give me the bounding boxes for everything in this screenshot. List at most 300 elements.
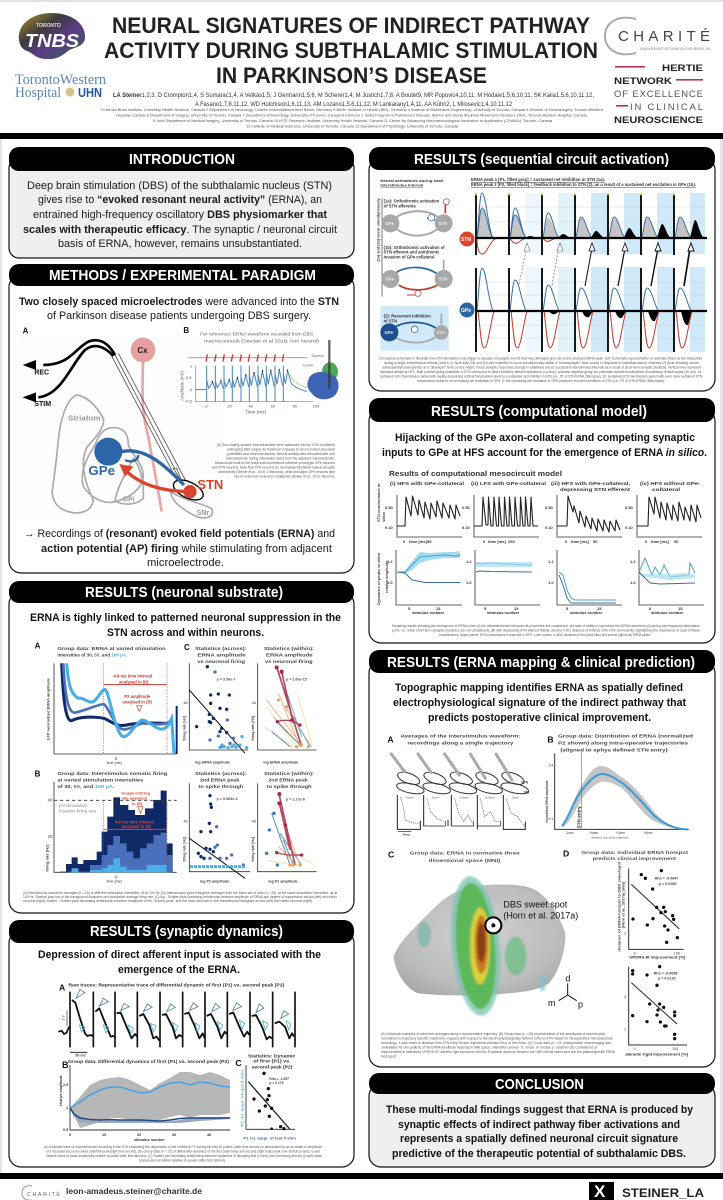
chart A: ERNA amplitude vs time: 4-9 ms time interval — [113, 674, 152, 679]
upper charts: STN conductance traces: 0.50 — [545, 505, 554, 510]
chart D: clinical improvement scatter: p = 0.0168 — [659, 882, 676, 886]
footer: X handle: STEINER_LA — [622, 1186, 704, 1200]
lower charts: peak dynamics: 1.0 — [630, 580, 636, 585]
chart B: P1 vs P2 dynamics — [59, 1059, 230, 1142]
figure B: ERNA waveform: For reference: ERNA waveform recorded from DBS — [200, 332, 313, 338]
figure caption: rise to extensive local axon collaterals (Bolam et al., 2012, Neuron). — [234, 474, 335, 478]
chart B: firing histogram: at varied stimulation intensities — [57, 778, 144, 783]
chart B: P1 vs P2 dynamics: B — [62, 1060, 69, 1070]
figure B: ERNA waveform: 0 — [190, 387, 193, 392]
chart C: scatter statistics: 2nd ERNA peak — [200, 778, 240, 783]
heading: sequential circuit activation: RESULTS (sequential circuit activation) — [414, 151, 669, 168]
chart B: firing histogram — [35, 770, 177, 884]
methods conclusion text: → Recordings of (resonant) evoked field potentials (ERNA) and — [24, 528, 335, 540]
heading: methods: METHODS / EXPERIMENTAL PARADIGM — [49, 267, 316, 284]
figure caption: transmission leads to an increasing net excitation in GPe. 2: the increasing net excitation in GPe produces recurrent inhibition of STN (i.e., P2 of STN ERNA, filled black). — [417, 379, 665, 383]
chart B: firing histogram: in (D) — [132, 801, 143, 806]
chart A: ERNA amplitude vs time: analysed in (B) — [122, 700, 153, 705]
model chart titles: (iv) HFS without GPe- — [640, 481, 701, 486]
chart B: firing histogram: 0 — [115, 874, 118, 879]
chart C: scatter statistics: log P2 amplitude — [268, 880, 298, 884]
computational lead text: inputs to GPe at HFS account for the emergence of ERNA in silico. — [382, 447, 707, 459]
synaptic lead text: Depression of direct afferent input is associated with the — [38, 949, 321, 961]
chart C: scatter statistics: log P2 amplitude — [200, 880, 229, 884]
chart A: single trajectory waveforms: 1mm — [432, 795, 439, 799]
chart C: scatter statistics: Statistics (within): — [264, 646, 315, 651]
chart A: raw traces: 1 V — [61, 1015, 65, 1021]
methods lead text: Two closely spaced microelectrodes were advanced into the STN — [19, 296, 339, 308]
panel: introduction — [9, 147, 354, 258]
upper charts: STN conductance traces: 0 — [565, 539, 568, 544]
chart B: ERNA along trajectories: P2 shown) along intra-operative trajectories — [558, 741, 689, 746]
lower charts: peak dynamics: 15 — [678, 606, 683, 611]
figure B: ERNA waveform: 20 — [227, 404, 233, 409]
chart A: ERNA amplitude vs time: Group data: ERNA at varied stimulation — [57, 646, 166, 651]
chart D: clinical improvement scatter: 3 — [624, 995, 626, 999]
figure A: anatomical schematic with electrode: SNr — [197, 510, 209, 517]
heading: synaptic dynamics: RESULTS (synaptic dynamics) — [90, 923, 283, 940]
logo: Hertie Network: HERTIE — [662, 63, 703, 74]
GPe node: GPe — [461, 308, 471, 314]
chart C: scatter statistics: Statistics (within): — [264, 771, 315, 776]
chart B: firing histogram: Group data: Interstimulus somatic firing — [57, 771, 168, 776]
chart C: scatter statistics: 40 — [252, 700, 257, 705]
logo: TNBS Toronto: TORONTO — [36, 23, 61, 29]
logo: Charité: UNIVERSITÄTSMEDIZIN BERLIN — [640, 47, 710, 51]
upper charts: STN conductance traces: 50 — [427, 539, 432, 544]
logo: Hertie Network: OF EXCELLENCE — [614, 89, 703, 100]
footer: contact — [22, 1186, 202, 1200]
upper charts: STN conductance traces: 50 — [674, 539, 679, 544]
chart A: single trajectory waveforms: recordings along a single trajectory — [407, 741, 514, 746]
figure caption: potentials and neuronal activity. Neural activity was recorded with one — [227, 452, 335, 456]
upper charts: STN conductance traces: 0.10 — [385, 525, 394, 530]
poster header — [15, 13, 710, 128]
heading: computational model: RESULTS (computational model) — [431, 403, 647, 420]
chart A: single trajectory waveforms: A — [387, 735, 394, 745]
methods conclusion text: action potential (AP) firing while stimulating from adjacent — [41, 543, 332, 555]
chart C: scatter statistics — [183, 643, 317, 884]
chart B: P1 vs P2 dynamics: 10 — [102, 1133, 106, 1137]
chart C: scatter statistics: vs neuronal firing — [197, 659, 245, 664]
figure B: ERNA waveform: Time (ms) — [245, 410, 267, 415]
chart C: P1 vs P2 scatter: p = 0.173 — [269, 1081, 284, 1085]
figure caption: individual stimuli at HFS. Blue positive-going potentials in STN correspond to direct inhibitory afferent activations (1a blue), whereas negative-going red potentials represent activations of excitatory vertical inputs (1b red). 1a: — [380, 370, 702, 374]
chart C: ERNA in MNI space: dimentional space (MNI) — [429, 858, 501, 863]
figure caption: Conceptual schematic to illustrate how STN stimulation may trigger a cascade of synaptic events that may ultimately give rise to the resonant ERNA peak. Left: Schematic representation of activated fibers at two timepoints — [379, 356, 702, 360]
chart B: P1 vs P2 dynamics: Group data: Differential dynamics of first (P1) vs. second peak (P2) — [68, 1059, 229, 1064]
methods conclusion text — [24, 528, 335, 569]
heading: ERNA mapping — [369, 650, 715, 673]
chart C: ERNA in MNI space: C — [388, 850, 395, 860]
lower charts: peak dynamics: 5 — [566, 606, 569, 611]
chart C: P1 vs P2 scatter: P1 rel. ampl. of last 5 stim — [243, 1135, 296, 1140]
heading: neuronal substrate: RESULTS (neuronal substrate) — [85, 584, 283, 601]
chart B: firing histogram: B — [35, 770, 41, 779]
chart C: scatter statistics: ERNA amplitude — [197, 653, 246, 658]
upper charts: STN conductance traces: 250 — [508, 539, 515, 544]
chart C: scatter statistics: log ERNA amplitude — [263, 760, 298, 764]
orientation axes — [548, 974, 583, 1010]
chart D: clinical improvement scatter: akinetic-rigid improvement [%] — [625, 1051, 689, 1056]
title: ACTIVITY DURING SUBTHALAMIC STIMULATION — [104, 38, 598, 63]
STN node: STN — [461, 237, 471, 243]
chart A: ERNA amplitude vs time — [35, 642, 178, 765]
introduction text: Deep brain stimulation (DBS) of the subthalamic nucleus (STN) — [27, 180, 332, 192]
affiliations: 1 Krembil Brain Institute, University Health Network, Canada 2 Department of Neurology, Charité-Universitätsmedizin Berlin, Germany 3 Berlin Institute of Health (BIH), Germany 4 Institute of Biomedical Engineering, University of Toronto, Canada 5 Division of Neurosurgery, Toronto Western — [100, 108, 603, 112]
introduction text — [23, 180, 337, 250]
circuit schematics: (1a): Orthodromic activation — [384, 198, 440, 203]
conclusion text: predictive of the therapeutic potential of subthalamic DBS. — [392, 1148, 686, 1160]
mapping lead text: Topographic mapping identifies ERNA as spatially defined — [395, 682, 683, 694]
chart C: P1 vs P2 scatter: Rho = -1.697 — [269, 1077, 289, 1081]
upper charts: STN conductance traces: 0 — [645, 539, 648, 544]
figure caption: subsequently/consequently, at a "disynaptic" time course. Right: These synaptic responses change in amplitude across successive interstimulus intervals as a result of short-term synaptic plasticity. Vertical lines represent — [382, 366, 701, 370]
circuit schematics: (1b): Orthodromic activation of — [384, 245, 445, 250]
chart B: P1 vs P2 dynamics: 30 — [172, 1133, 176, 1137]
neuronal lead text: ERNA is tighly linked to patterned neuronal suppression in the — [30, 612, 341, 624]
figure caption: (A) Example trace of microelectrode recording in the STN illustrating the depression of the inhibitory P1 during the first 10 pulses (dark blue arrows) is associated by an increase in amplitude — [44, 1145, 322, 1149]
STN node — [460, 232, 474, 246]
chart B: ERNA along trajectories: normalized ERNA amplitude — [545, 780, 549, 823]
lower charts: peak dynamics: 1.2 — [630, 559, 636, 564]
upper charts: STN conductance traces: time [ms] — [409, 539, 427, 544]
chart B: firing histogram: analysed in (D) — [122, 824, 152, 829]
circuit schematics: STN — [437, 330, 445, 335]
logo: Toronto Western Hospital UHN — [15, 72, 106, 101]
introduction text: gives rise to “evoked resonant neural activity” (ERNA), an — [38, 194, 322, 206]
lower charts: peak dynamics: stimulus number — [487, 610, 520, 615]
chart C: scatter statistics: 40 — [252, 818, 257, 823]
figure caption: improvements in lateralized UPDRS-III / akinetic-rigid subscores and the Euclidean distance between the DBS clinical sweet spot and the patient-specific ERNA — [381, 1050, 616, 1054]
lower charts: peak dynamics: 6 — [649, 606, 652, 611]
chart A: ERNA amplitude vs time: intensities of 30, 50, and 100 µA. — [57, 652, 127, 657]
chart D: clinical improvement scatter: 100 — [672, 1047, 678, 1051]
figure A: anatomical schematic with electrode: Striatum — [68, 416, 101, 423]
title — [104, 13, 598, 88]
figure caption — [44, 1145, 322, 1162]
chart heading text: ERNA peak 2 [P2, filled black] = feedback inhibition to STN (2), as a result of a sustained net excitation in GPe (1b). — [471, 182, 696, 187]
figure caption: neurons (right); bottom - Scatter plots illustrating relationship between amplitude of the "second peak" and the local minimum in the interstimulus histogram across (left) and within neurons (right). — [23, 899, 313, 903]
figure A: anatomical schematic with electrode: Cx — [137, 346, 148, 355]
figure B: ERNA waveform: macrocontacts (Sinclair et al 2018; Ann Neurol) — [204, 338, 319, 344]
heading: conclusion: CONCLUSION — [495, 1076, 584, 1093]
circuit schematics: GPe — [385, 277, 395, 282]
model chart titles: (iii) HFS with GPe-collateral, — [551, 481, 630, 486]
figure A: anatomical schematic with electrode: REC — [34, 370, 49, 377]
logo: TNBS Toronto: TNBS — [25, 31, 79, 51]
chart B: firing histogram: 40 — [48, 797, 53, 802]
logo: Toronto Western Hospital UHN: TorontoWestern — [15, 72, 106, 88]
logo: Toronto Western Hospital UHN: UHN — [78, 85, 102, 100]
sweet spot label: (Horn et al. 2017a) — [503, 910, 578, 920]
figure caption: 100 Hz. Shaded gray box in the background illustrates pre-stimulation average firing rate. (C) top - Scatter plots illustrating relationship between amplitude of ERNA and degree of suppression across (left) and within — [23, 895, 337, 899]
chart C: scatter statistics: vs neuronal firing — [265, 659, 313, 664]
neuronal lead text — [30, 612, 341, 639]
chart A: single trajectory waveforms: SNr — [524, 790, 530, 794]
chart D: clinical improvement scatter: 0 — [634, 1047, 636, 1051]
panel: ERNA mapping and clinical prediction — [369, 650, 715, 1067]
chart D: clinical improvement scatter: p = 0.0120 — [658, 977, 676, 981]
chart C: scatter statistics: 2nd ERNA peak — [268, 778, 308, 783]
figure caption: (LFS; i.e., when short-term synaptic dynamics are not considered), (iii) with depressing STN efferent fidelity, and (iv) in the absence of intrinsic GPe-GPe connectivity, highlighting the importance of each of these — [392, 628, 700, 632]
computational lead text: Hijacking of the GPe axon-collateral and competing synaptic — [395, 432, 695, 444]
chart C: scatter statistics: Statistics (across): — [195, 771, 247, 776]
heading: methods — [9, 264, 354, 286]
circuit schematics: interstimulus interval — [380, 184, 423, 188]
chart D: clinical improvement scatter: predicts clinical improvement — [593, 856, 677, 861]
panel: synaptic dynamics — [9, 920, 354, 1167]
figure caption — [381, 1032, 616, 1058]
arrows from GPe to STN — [519, 243, 694, 286]
neuronal lead text: STN across and within neurons. — [107, 627, 264, 639]
chart B: P1 vs P2 dynamics: stimulus number — [134, 1138, 165, 1142]
chart B: ERNA along trajectories: 0.4 — [549, 764, 553, 768]
chart B: ERNA along trajectories: Group data: Distribution of ERNA (normalized — [558, 733, 693, 738]
mapping lead text: predicts postoperative clinical improvement. — [428, 712, 651, 724]
chart C: scatter statistics: Statistics (across): — [195, 646, 247, 651]
chart C: scatter statistics: to spike through — [198, 784, 244, 789]
figure B: ERNA waveform: Superior — [311, 354, 325, 358]
chart A: single trajectory waveforms: +1mm — [405, 795, 414, 799]
heading: synaptic dynamics — [9, 920, 354, 943]
synaptic lead text: emergence of the ERNA. — [118, 964, 240, 976]
lower charts: peak dynamics: 15 — [514, 606, 519, 611]
chart heading text: ERNA peak 1 [P1, filled gray] = sustained net inhibition in STN (1a). — [471, 177, 605, 182]
chart C: scatter statistics: C — [184, 643, 190, 652]
circuit schematics: Neural activations during each — [380, 179, 444, 183]
chart A: single trajectory waveforms: STN — [521, 780, 529, 784]
methods lead text — [19, 296, 339, 322]
chart B: ERNA along trajectories: +6mm — [644, 831, 653, 835]
chart C: P1 vs P2 scatter: second peak (P2) — [252, 1065, 293, 1070]
circuit schematics: invasion of GPe collateral — [384, 254, 434, 259]
circuit schematics — [376, 179, 453, 351]
heading: introduction: INTRODUCTION — [129, 151, 235, 168]
circuit schematics: of STN — [384, 318, 397, 323]
figure B: ERNA waveform: 0.5 — [186, 375, 192, 380]
chart D: clinical improvement scatter: (Horn et al., 2017a) [mm] — [621, 881, 625, 928]
heading: neuronal substrate — [9, 581, 354, 603]
model chart titles: Results of computational mesocircuit model — [389, 471, 562, 478]
chart C: ERNA in MNI space: Group data: ERNA in normative three — [410, 851, 520, 856]
circuit schematics: STN — [439, 221, 447, 226]
figure caption: undergoing DBS surgery for Parkinson's disease to record evoked (resonant) — [227, 448, 335, 452]
authors — [113, 92, 594, 108]
figure caption: Modeling results showing the emergence of ERNA when (i) the aforementioned mesocircuit properties are considered, but lack of ability to reproduce the ERNA waveform (ii) during low-frequency stimulation — [392, 624, 700, 628]
chart C: scatter statistics: firing rate [Hz] — [251, 715, 255, 741]
chart B: ERNA along trajectories: B — [547, 735, 554, 745]
chart B: ERNA along trajectories: +5mm — [589, 831, 599, 835]
chart A: ERNA amplitude vs time: A — [35, 642, 41, 651]
chart A: single trajectory waveforms — [387, 733, 530, 836]
lower charts: peak dynamics: 5 — [408, 606, 411, 611]
upper charts: STN conductance traces: time [ms] — [488, 539, 506, 544]
chart C: scatter statistics: p = 1.17e-8 — [286, 798, 305, 802]
conclusion text: These multi-modal findings suggest that ERNA is produced by — [386, 1104, 694, 1116]
figure caption — [23, 891, 337, 903]
chart B: ERNA along trajectories: STN entry — [576, 806, 581, 828]
upper charts: STN conductance traces: time [ms] — [571, 539, 589, 544]
chart D: clinical improvement scatter: Rho = -0.5947 — [655, 877, 678, 881]
model chart titles: (i) HFS with GPe-collateral — [390, 481, 464, 486]
circuit schematics: STN efferent and antidromic — [384, 250, 440, 255]
sweet spot marker — [485, 917, 501, 933]
chart A: ERNA amplitude vs time: 5 — [115, 756, 118, 761]
figure caption: sustained GPe transmission paired with rapidly depressing cortical transmission leads to a sustained net inhibition in STN (i.e., P1 of STN ERNA, filled gray). 1b: sustained STN transmission paired with even more sustained STN — [380, 374, 703, 378]
chart A: raw traces — [58, 983, 295, 1058]
chart C: scatter statistics: log ERNA amplitude — [195, 760, 230, 764]
chart C: scatter statistics: firing rate [Hz] — [183, 715, 187, 741]
logo: TNBS Toronto — [19, 13, 85, 59]
figure caption: connectivity (Steiner et al., 2019, J Neurosci), while prototypic GPe neurons give — [218, 470, 335, 474]
chart C: scatter statistics: 40 — [183, 700, 189, 705]
figure B: ERNA waveform — [179, 326, 339, 415]
figure caption: during a single interstimulus interval (1a/b & 2). Note that (1a) and (1b) are expected to occur simultaneously within a "monosynaptic" time course in response to individual stimuli, whereas (2) (blue shading) occurs — [384, 361, 699, 365]
chart A: ERNA amplitude vs time: LFP normalized ERNA amplitude — [45, 677, 50, 740]
chart C: ERNA in MNI space — [388, 850, 583, 1018]
chart B: P1 vs P2 dynamics: 1 — [66, 1106, 68, 1110]
upper charts: STN conductance traces: time [ms] — [651, 539, 669, 544]
introduction text: basis of ERNA, however, remains unsubstantiated. — [58, 238, 302, 250]
figure caption: unavailable for one patient) of the ERNA amplitude heatmap in MNI space; orientation arrows - d: dorsal, m: medial, p: posterior (D) Correlations of — [381, 1046, 597, 1050]
chart C: scatter statistics: to spike through — [267, 784, 312, 789]
figure caption: hotspot — [381, 1054, 396, 1058]
GPe node — [460, 302, 474, 318]
lower charts: peak dynamics: 1.0 — [387, 580, 393, 585]
chart D: clinical improvement scatter: 0 — [634, 951, 636, 955]
affiliations — [100, 108, 603, 128]
upper charts: STN conductance traces — [376, 483, 702, 544]
upper charts: STN conductance traces: 0.10 — [545, 525, 554, 530]
chart A: raw traces: A — [59, 983, 66, 993]
chart A: raw traces: 50 ms — [75, 1054, 86, 1058]
chart B: P1 vs P2 dynamics: 0.5 — [63, 1128, 68, 1132]
lower charts: peak dynamics: 1.2 — [466, 559, 472, 564]
figure B: ERNA waveform: 1 — [190, 364, 193, 369]
figure caption: (A) Individual examples of waveform averages along a representative trajectory. (B) Group data (n = 26) representation of the amplitudes of second peak — [381, 1032, 605, 1036]
chart B: P1 vs P2 dynamics: relative amplitude — [59, 1075, 63, 1106]
computational lead text — [382, 432, 707, 459]
figure B: ERNA waveform: 40 — [249, 404, 254, 409]
upper charts: STN conductance traces: 0.50 — [625, 505, 634, 510]
affiliations: 12 Institute of Medical Sciences, University of Toronto, Canada 13 Department of Physiology, University of Toronto, Canada — [246, 124, 458, 128]
chart A: single trajectory waveforms: Averages of the interstimulus waveform: — [400, 733, 521, 738]
figure caption: (A) Interstimulus waveform averages (n = 20) at different stimulation intensities, all at 100 Hz. (B) Interstimulus spike histogram averages from the same set of cells (n = 20), at the same stimulation intensities, all at — [23, 891, 337, 895]
lower charts: peak dynamics: stimulus number — [570, 610, 603, 615]
authors: LA Steiner1,2,3, D Crompton1,4, S Sumarac1,4, A Vetkas1,5, J Germann1,5,6, M Scherer1,4, M Justich1,7,8, A Boutet9, MR Popovic4,10,11, M Hodaie1,5,6,10,11, SK Kalia1,5,6,10,11,12, — [113, 92, 594, 99]
chart C: P1 vs P2 scatter — [235, 1053, 296, 1140]
logo: Hertie Network: IN CLINICAL — [630, 102, 703, 113]
chart A: ERNA amplitude vs time: time [ms] — [107, 761, 122, 765]
chart D: clinical improvement scatter: 1 — [624, 1028, 626, 1032]
chart D: clinical improvement scatter: D — [563, 849, 569, 859]
chart C: P1 vs P2 scatter: Statistics: Dynamic — [248, 1053, 296, 1058]
circuit schematics: GPe — [385, 221, 395, 226]
chart B: firing histogram: 4-9 ms time interval — [115, 819, 154, 824]
chart A: raw traces: Raw traces: Representative trace of differential dynamic of first (P1) vs. second peak (P2) — [68, 983, 285, 988]
model chart titles: collateral — [652, 487, 680, 492]
figure A: anatomical schematic with electrode — [20, 326, 223, 518]
introduction text: entrained high-frequency oscillatory DBS physiomarker that — [33, 209, 327, 221]
figure B: ERNA waveform: 0 — [205, 404, 208, 409]
conclusion text: represents a spatially defined neuronal circuit signature — [400, 1133, 678, 1145]
figure A: anatomical schematic with electrode: STN — [197, 477, 223, 492]
chart A: single trajectory waveforms: 50ms — [403, 832, 411, 836]
upper charts: STN conductance traces: 0.50 — [462, 505, 471, 510]
chart C: scatter statistics: p = 3.50e-7 — [217, 678, 235, 682]
heading: sequential circuit activation — [369, 147, 715, 170]
orientation axes: p — [578, 1000, 583, 1010]
figure caption — [379, 356, 703, 383]
panel: methods — [9, 264, 354, 573]
chart B: ERNA along trajectories: 0.1 — [549, 817, 553, 821]
chart B: firing histogram: baseline firing rate — [59, 808, 97, 813]
figure caption: recordings. X-axis refers to distance from STN entry. Shade represents standard error of the mean. (C) Group data (n = 19; postoperative neuroimaging was — [381, 1041, 611, 1045]
chart B: P1 vs P2 dynamics: 0 — [69, 1133, 71, 1137]
lower charts: peak dynamics: 15 — [597, 606, 602, 611]
chart D: clinical improvement scatter — [563, 849, 689, 1056]
figure B: ERNA waveform: 100 — [313, 404, 320, 409]
figure B: ERNA waveform: 60 — [271, 404, 276, 409]
upper charts: STN conductance traces: 0 — [483, 539, 486, 544]
figure B: ERNA waveform: Amplitude (mV) — [179, 371, 184, 401]
chart C: P1 vs P2 scatter: P1 rel. ampl. of last 5 stim — [239, 1069, 244, 1127]
orientation axes: m — [548, 998, 555, 1008]
sweet spot label: DBS sweet spot — [503, 900, 568, 910]
upper charts: STN conductance traces: silico — [381, 511, 386, 522]
logo: Charité: CHARITÉ — [618, 28, 710, 45]
upper charts: STN conductance traces: STN conductance in — [376, 483, 381, 522]
figure B: ERNA waveform: Dorsal — [303, 363, 313, 367]
figure caption: of a resonant second evoked potential peak (light blue arrows). (B) Group data (n = 12) of differential dynamics of the first (dark blue) and second (light blue) peak over stimuli (x-axis). y-axis — [46, 1150, 320, 1154]
logo: Hertie Network: NEUROSCIENCE — [614, 115, 703, 126]
title: IN PARKINSON’S DISEASE — [216, 63, 487, 88]
heading: introduction — [9, 147, 354, 171]
lower charts: peak dynamics: 1.2 — [548, 559, 554, 564]
chart C: scatter statistics: p = 5.963e-4 — [217, 797, 238, 801]
chart: neural activation waveforms — [460, 193, 707, 352]
chart B: firing histogram: firing rate [Hz] — [45, 844, 50, 872]
chart B: firing histogram: trough of firing — [121, 790, 150, 795]
authors: A Fasano1,7,8,11,12, WD Hutchison1,6,11,13, AM Lozano1,5,6,11,12, M Lankarany1,4,11, AA Kühn2, L Milosevic1,4,10,11,12 — [195, 101, 512, 108]
heading: computational model — [369, 398, 715, 422]
figure B: ERNA waveform: B — [183, 326, 189, 335]
figure B: ERNA waveform: 80 — [293, 404, 298, 409]
figure caption: microelectrode during stimulation trains from the adjacent microelectrode. — [226, 456, 335, 460]
model chart titles: depressing STN efferent — [560, 487, 631, 492]
chart B: P1 vs P2 dynamics: 20 — [137, 1133, 141, 1137]
chart A: single trajectory waveforms: -5mm — [511, 795, 519, 799]
chart B: ERNA along trajectories: distance along the trajectory — [591, 836, 629, 840]
mapping lead text: electrophysiological signature of the indirect pathway that — [393, 697, 686, 709]
orientation axes: d — [565, 974, 570, 984]
figure caption: and STN neurons. Note that STN neurons do not display functional mutual synaptic — [212, 466, 335, 470]
synaptic lead text — [38, 949, 321, 976]
conclusion text: synaptic effects of indirect pathway fiber activations and — [398, 1119, 680, 1131]
logo: Toronto Western Hospital UHN: Hospital — [15, 85, 61, 101]
logo: Hertie Network — [614, 63, 703, 126]
chart C: P1 vs P2 scatter: C — [235, 1058, 242, 1068]
chart B: ERNA along trajectories — [545, 733, 693, 840]
lower charts: peak dynamics: Dynamics of peaks in silico — [376, 552, 381, 605]
figure B: ERNA waveform: -0.5 — [185, 398, 193, 403]
chart B: P1 vs P2 dynamics: 1.5 — [63, 1083, 68, 1087]
panel: neuronal substrate — [9, 581, 354, 913]
chart C: scatter statistics: p = 2.60e-15 — [286, 678, 307, 682]
figure A: anatomical schematic with electrode: A — [23, 326, 29, 335]
figure caption: (measured as ratios relative to peaks after first stimuli). — [139, 1158, 226, 1162]
